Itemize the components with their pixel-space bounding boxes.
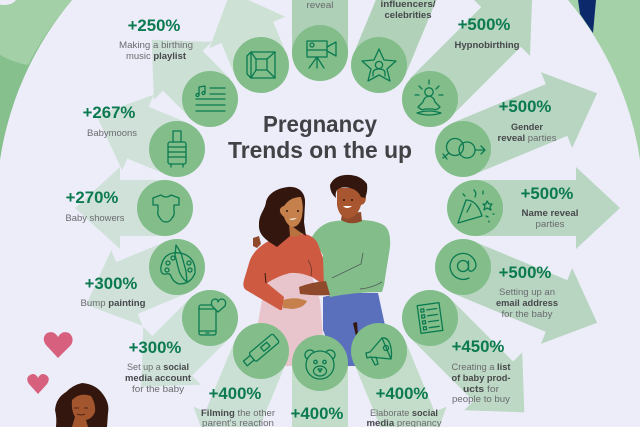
text: baby products list: Creating a list bbox=[452, 361, 510, 372]
text: social media pregnancy bbox=[366, 384, 442, 427]
icon: video camera bbox=[292, 25, 348, 81]
icon: pregnancy test bbox=[233, 323, 289, 379]
corner: top-right green shape bbox=[568, 0, 640, 160]
text: bump painting: Bump painting bbox=[80, 297, 146, 308]
icon: meditation bbox=[402, 71, 458, 127]
text: influencers: celebrities bbox=[384, 9, 432, 20]
text: social media account: Set up a social bbox=[127, 361, 189, 372]
text: gender reveal: Gender bbox=[511, 121, 543, 132]
text: hypnobirthing: Hypnobirthing bbox=[454, 39, 520, 50]
text: gender reveal bbox=[498, 97, 557, 143]
icon: large heart bbox=[44, 332, 73, 358]
man face bbox=[337, 188, 366, 219]
icon: gender symbols bbox=[435, 121, 491, 177]
woman face bbox=[280, 197, 303, 227]
icon: party popper bbox=[447, 180, 503, 236]
illustration: couple bbox=[243, 175, 390, 366]
corner: top-left green shape bbox=[0, 0, 72, 160]
arrow: frame bbox=[193, 0, 299, 80]
hands bbox=[253, 236, 261, 248]
title bbox=[228, 111, 412, 163]
text: baby showers: Baby showers bbox=[66, 212, 125, 223]
text: social media pregnancy: Elaborate social bbox=[370, 407, 438, 418]
text: name reveal: parties bbox=[536, 218, 565, 229]
text: name reveal bbox=[521, 184, 578, 229]
text: social media account: for the baby bbox=[132, 383, 184, 394]
man neck bbox=[341, 212, 362, 223]
icon: music playlist bbox=[182, 71, 238, 127]
arrow: baby showers bbox=[75, 167, 165, 249]
text: name reveal: Name reveal bbox=[522, 207, 578, 218]
text: babymoons: Babymoons bbox=[87, 127, 137, 138]
text: filming reaction: +400% bbox=[209, 384, 261, 403]
text: email: Setting up an bbox=[499, 286, 555, 297]
text: bump painting bbox=[80, 274, 146, 308]
arrow: influencers bbox=[341, 0, 480, 80]
illustration: woman bottom left bbox=[55, 383, 108, 427]
arrow: name reveal bbox=[475, 167, 620, 249]
arrow: social media pregnancy bbox=[341, 336, 463, 427]
text: social media pregnancy: +400% bbox=[376, 384, 428, 403]
text: influencers bbox=[380, 0, 436, 20]
icon: teddy bear bbox=[292, 335, 348, 391]
icon: suitcase bbox=[149, 121, 205, 177]
man trousers bbox=[323, 293, 390, 366]
text: hypnobirthing bbox=[454, 15, 520, 50]
title: Trends on the up bbox=[228, 137, 412, 163]
text: email: +500% bbox=[499, 263, 551, 282]
text: baby products list: ucts for bbox=[463, 383, 499, 394]
arrow: film reveal bbox=[279, 0, 361, 53]
woman neck bbox=[287, 222, 303, 237]
icon: baby onesie bbox=[137, 180, 193, 236]
icon: frame bbox=[233, 37, 289, 93]
icon: paint palette bbox=[149, 239, 205, 295]
text: bear trend: +400% bbox=[291, 404, 343, 423]
text: name reveal: +500% bbox=[521, 184, 573, 203]
text: playlist: music playlist bbox=[126, 50, 186, 61]
icon: checklist bbox=[402, 290, 458, 346]
arrow: bear bbox=[279, 363, 361, 427]
text: baby products list bbox=[452, 337, 510, 404]
text: playlist bbox=[119, 16, 193, 61]
woman dress bbox=[258, 273, 325, 366]
text: babymoons: +267% bbox=[83, 103, 135, 122]
icon: small heart bbox=[27, 374, 49, 394]
text: filming reaction bbox=[201, 384, 275, 427]
icon: megaphone bbox=[351, 323, 407, 379]
text: baby products list: +450% bbox=[452, 337, 504, 356]
woman hair bbox=[259, 187, 306, 247]
arrow: hypnobirthing bbox=[401, 0, 561, 127]
arrow: gender reveal bbox=[448, 55, 613, 187]
text: baby products list: of baby prod- bbox=[452, 372, 510, 383]
icon: at sign bbox=[435, 239, 491, 295]
arrow: list of products bbox=[401, 289, 553, 427]
arrow: email address bbox=[448, 229, 613, 361]
circles with icons bbox=[137, 25, 503, 391]
text: babymoons bbox=[83, 103, 137, 138]
text: baby showers bbox=[66, 188, 125, 223]
text: baby products list: people to buy bbox=[452, 393, 510, 404]
text: playlist: +250% bbox=[128, 16, 180, 35]
text: social media account: +300% bbox=[129, 338, 181, 357]
text: gender reveal: reveal parties bbox=[498, 132, 557, 143]
text: gender reveal: +500% bbox=[499, 97, 551, 116]
arrow: filming reaction bbox=[177, 336, 299, 427]
text: hypnobirthing: +500% bbox=[458, 15, 510, 34]
man sweater bbox=[312, 220, 390, 297]
text: baby showers: +270% bbox=[66, 188, 118, 207]
arrow: babymoons bbox=[81, 78, 192, 187]
icon: phone with heart bbox=[182, 290, 238, 346]
arrow: social media account bbox=[112, 289, 239, 416]
icon: star person bbox=[351, 37, 407, 93]
text: bump painting: +300% bbox=[85, 274, 137, 293]
arrow: playlist bbox=[123, 11, 239, 127]
text: filming reaction: Filming the other bbox=[201, 407, 275, 418]
man hair bbox=[330, 175, 367, 198]
text: social media account bbox=[125, 338, 191, 394]
text: playlist: Making a birthing bbox=[119, 39, 193, 50]
title: Pregnancy bbox=[263, 111, 377, 137]
text: email bbox=[496, 263, 558, 319]
text: email: email address bbox=[496, 297, 558, 308]
text: email: for the baby bbox=[502, 308, 553, 319]
woman sweater bbox=[243, 234, 324, 310]
arrow: bump painting bbox=[71, 229, 192, 343]
text: social media account: media account bbox=[125, 372, 191, 383]
